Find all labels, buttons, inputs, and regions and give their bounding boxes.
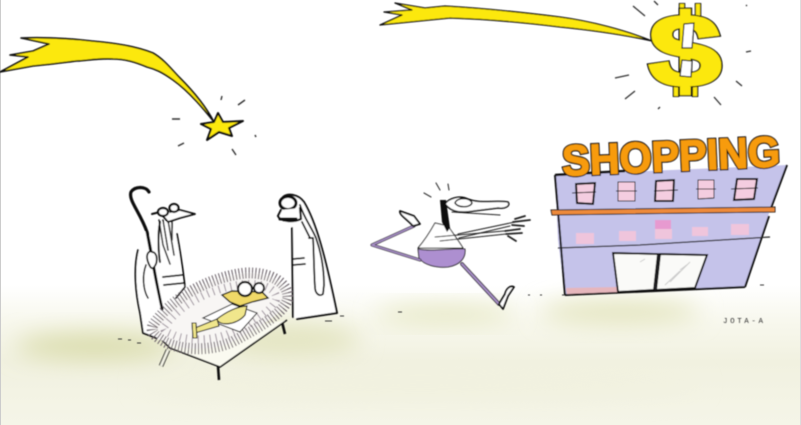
doors bbox=[613, 253, 707, 292]
shopping mall building bbox=[551, 128, 787, 295]
manger with straw and baby bbox=[152, 273, 288, 380]
shopping sign: SHOPPING bbox=[561, 128, 781, 186]
signature: JOTA-A bbox=[723, 318, 763, 326]
orange band bbox=[551, 207, 775, 215]
Mary figure bbox=[278, 195, 337, 319]
icon: shooting star left bbox=[0, 38, 256, 155]
windows lower floor bbox=[576, 220, 749, 244]
windows upper floor bbox=[572, 179, 758, 204]
shopping sign: SHOPPING bbox=[561, 128, 781, 186]
icon: shooting dollar comet bbox=[380, 0, 751, 109]
ground marks bbox=[118, 285, 764, 343]
running shopper figure bbox=[372, 183, 530, 309]
shepherd figure bbox=[131, 188, 195, 340]
